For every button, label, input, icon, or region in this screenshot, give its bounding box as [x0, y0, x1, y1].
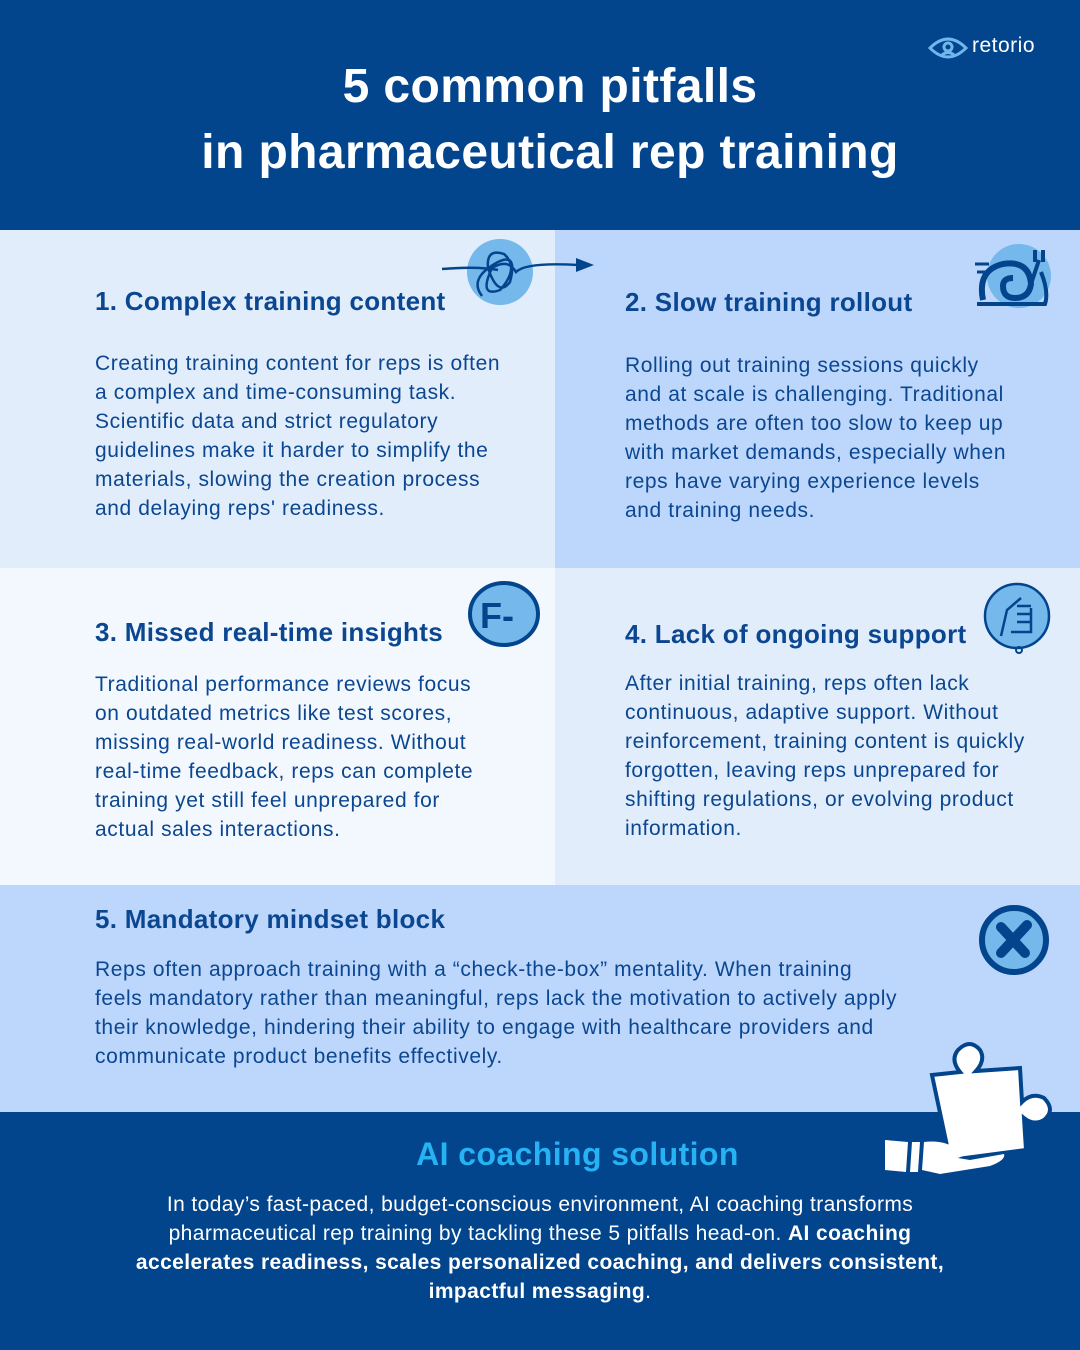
panel: 3 missed real-time insights: actual sales interactions.	[95, 818, 341, 841]
panel: 1 complex training content: guidelines make it harder to simplify the	[95, 439, 488, 462]
panel: 1 complex training content: a complex and time-consuming task.	[95, 381, 456, 404]
panel: 4 lack of ongoing support: reinforcement, training content is quickly	[625, 730, 1025, 753]
icon: X circle	[979, 905, 1049, 975]
panel: 1 complex training content: Scientific data and strict regulatory	[95, 410, 438, 433]
panel: 4 lack of ongoing support: forgotten, leaving reps unprepared for	[625, 759, 999, 782]
panel: 1 complex training content: and delaying reps' readiness.	[95, 497, 385, 520]
panel: 5 mandatory mindset block	[0, 885, 1080, 1112]
logo: retorio	[972, 34, 1035, 57]
panel: 5 mandatory mindset block: Reps often approach training with a “check-the-box” mentality. When training	[95, 958, 852, 981]
icon: snail	[975, 244, 1051, 308]
header	[0, 0, 1080, 230]
panel: 3 missed real-time insights: Traditional performance reviews focus	[95, 673, 471, 696]
panel: 3 missed real-time insights: on outdated metrics like test scores,	[95, 702, 452, 725]
logo	[928, 34, 1035, 58]
footer: AI coaching solution: impactful messaging.	[429, 1280, 651, 1303]
panel: 4 lack of ongoing support: continuous, adaptive support. Without	[625, 701, 999, 724]
panel: 4 lack of ongoing support: information.	[625, 817, 742, 840]
icon: hand	[984, 582, 1050, 654]
panel: 2 slow training rollout: reps have varying experience levels	[625, 470, 980, 493]
footer: AI coaching solution: pharmaceutical rep training by tackling these 5 pitfalls head-on. AI coaching	[169, 1222, 911, 1245]
panel: 2 slow training rollout: and training needs.	[625, 499, 815, 522]
icon: F- grade: F-	[480, 595, 514, 636]
footer: AI coaching solution: In today’s fast-paced, budget-conscious environment, AI coaching transforms	[167, 1193, 913, 1216]
panel: 3 missed real-time insights: 3. Missed real-time insights	[95, 617, 443, 647]
panel: 2 slow training rollout: Rolling out training sessions quickly	[625, 354, 979, 377]
panel: 5 mandatory mindset block: feels mandatory rather than meaningful, reps lack the motivation to actively apply	[95, 987, 897, 1010]
panel: 5 mandatory mindset block: 5. Mandatory mindset block	[95, 904, 445, 934]
icon: hand holding puzzle piece	[885, 1042, 1052, 1174]
panel: 3 missed real-time insights: missing real-world readiness. Without	[95, 731, 466, 754]
panel: 3 missed real-time insights	[0, 568, 555, 885]
panel: 1 complex training content	[0, 230, 555, 568]
title	[201, 60, 899, 179]
footer: AI coaching solution: accelerates readiness, scales personalized coaching, and delivers consistent,	[136, 1251, 944, 1274]
panel: 1 complex training content: Creating training content for reps is often	[95, 352, 500, 375]
panel: 2 slow training rollout: with market demands, especially when	[625, 441, 1006, 464]
panel: 2 slow training rollout: 2. Slow training rollout	[625, 287, 912, 317]
title: in pharmaceutical rep training	[201, 126, 899, 179]
icon: tangled line with arrow	[442, 239, 594, 305]
footer: AI coaching solution: AI coaching solution	[416, 1136, 739, 1172]
panel: 4 lack of ongoing support: After initial training, reps often lack	[625, 672, 969, 695]
panel: 3 missed real-time insights: training yet still feel unprepared for	[95, 789, 440, 812]
panel: 4 lack of ongoing support: shifting regulations, or evolving product	[625, 788, 1014, 811]
panel: 2 slow training rollout	[555, 230, 1080, 568]
panel: 4 lack of ongoing support	[555, 568, 1080, 885]
title: 5 common pitfalls	[343, 60, 757, 113]
icon: F- grade	[468, 581, 540, 647]
panel: 4 lack of ongoing support: 4. Lack of ongoing support	[625, 619, 966, 649]
panel: 2 slow training rollout: methods are often too slow to keep up	[625, 412, 1003, 435]
panel: 1 complex training content: 1. Complex training content	[95, 286, 445, 316]
panel: 1 complex training content: materials, slowing the creation process	[95, 468, 480, 491]
panel: 2 slow training rollout: and at scale is challenging. Traditional	[625, 383, 1004, 406]
footer: AI coaching solution	[0, 1112, 1080, 1350]
panel: 5 mandatory mindset block: communicate product benefits effectively.	[95, 1045, 503, 1068]
panel: 5 mandatory mindset block: their knowledge, hindering their ability to engage with healthcare providers and	[95, 1016, 874, 1039]
panel: 3 missed real-time insights: real-time feedback, reps can complete	[95, 760, 473, 783]
